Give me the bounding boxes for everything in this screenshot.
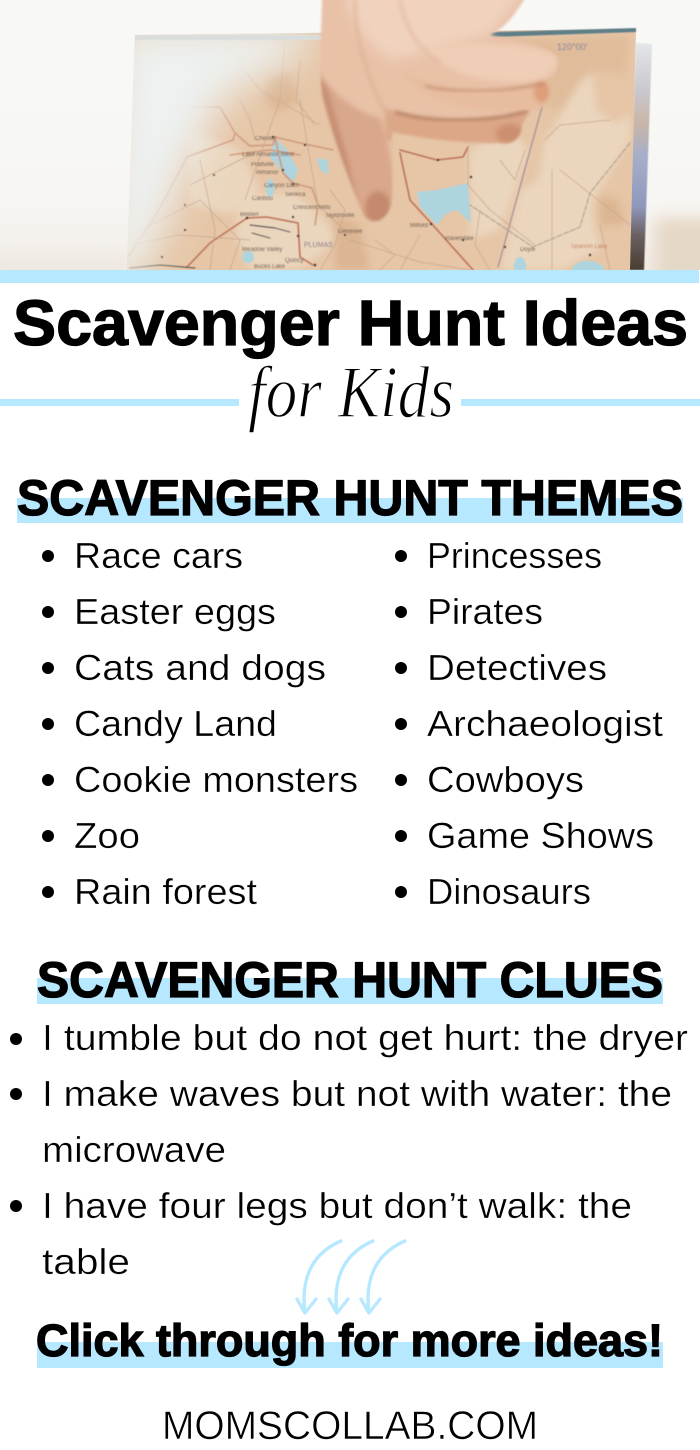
- list: themes right column: Cowboys: [427, 759, 584, 800]
- list: themes left column: Zoo: [74, 815, 140, 856]
- map place labels: Belden: [240, 212, 259, 218]
- list: clues: I make waves but not with water: the: [42, 1073, 672, 1114]
- finger two: [435, 90, 534, 105]
- back of hand highlight: [345, 0, 525, 60]
- list: clues: table: [42, 1241, 130, 1282]
- map place labels: Meadow Valley: [242, 247, 282, 253]
- subtitle: for Kids: [248, 352, 454, 434]
- map dots: [161, 136, 591, 266]
- map place labels: Genesee: [338, 229, 363, 235]
- list: themes left column: Cookie monsters: [74, 759, 358, 800]
- list: themes right column: Game Shows: [427, 815, 654, 856]
- map place labels: Taylorsville: [325, 213, 355, 219]
- top blue band: [0, 270, 699, 283]
- list: clues: [10, 1017, 688, 1282]
- website footer: MOMSCOLLAB.COM: [162, 1404, 538, 1448]
- map place labels: Doyle: [520, 247, 536, 253]
- finger one: [425, 44, 556, 82]
- list: themes left column: [42, 535, 358, 912]
- map place labels: Milford: [410, 223, 428, 229]
- pointing finger shading: [320, 75, 394, 222]
- list: clues: microwave: [42, 1129, 226, 1170]
- map place labels: Prattville: [251, 162, 275, 168]
- list: themes right column: [395, 535, 663, 912]
- map place labels: Bucks Lake: [254, 264, 286, 270]
- list: themes left column: Rain forest: [74, 871, 257, 912]
- map roads: [128, 40, 630, 270]
- map place labels: Lake Almanor West: [242, 152, 294, 158]
- list: themes right column: Detectives: [427, 647, 607, 688]
- map place labels: 120°00': [557, 42, 588, 52]
- list: themes left column: Easter eggs: [74, 591, 276, 632]
- list: themes left column: Race cars: [74, 535, 243, 576]
- left rule: [0, 399, 239, 406]
- right rule: [461, 399, 700, 406]
- map place labels: Crescent Mills: [293, 205, 331, 211]
- heading: clues: SCAVENGER HUNT CLUES: [37, 952, 663, 1008]
- list: themes left column: Candy Land: [74, 703, 277, 744]
- map place labels: Ravendale: [445, 236, 474, 242]
- finger three: [384, 108, 528, 144]
- list: themes right column: Dinosaurs: [427, 871, 591, 912]
- map lakes: [242, 138, 604, 279]
- map place labels: [240, 42, 608, 270]
- heading: themes: SCAVENGER HUNT THEMES: [17, 470, 683, 526]
- list: clues: I have four legs but don’t walk: the: [42, 1185, 632, 1226]
- map place labels: Spanish Lake: [571, 244, 608, 250]
- list: themes right column: Pirates: [427, 591, 543, 632]
- map place labels: Almanor: [256, 170, 278, 176]
- call to action: Click through for more ideas!: [36, 1315, 663, 1366]
- map place labels: PLUMAS: [304, 242, 333, 249]
- list: themes right column: Princesses: [427, 535, 602, 576]
- map place labels: Quincy: [285, 258, 304, 264]
- creases between fingers: [425, 83, 545, 91]
- list: themes right column: Archaeologist: [427, 703, 663, 744]
- list: clues: I tumble but do not get hurt: the dryer: [42, 1017, 688, 1058]
- map place labels: Chester: [255, 136, 276, 142]
- list: themes left column: Cats and dogs: [74, 647, 326, 688]
- map left fade: [127, 33, 320, 270]
- arrows pointing to call to action: [297, 1241, 405, 1313]
- map place labels: Caribou: [252, 196, 273, 202]
- map place labels: Seneca: [285, 192, 306, 198]
- photo: child's hand holding a road map: [0, 0, 700, 288]
- map top edge: [490, 28, 637, 38]
- map place labels: Canyon Dam: [264, 183, 299, 189]
- hand: [320, 0, 558, 222]
- title: Scavenger Hunt Ideas: [13, 287, 688, 359]
